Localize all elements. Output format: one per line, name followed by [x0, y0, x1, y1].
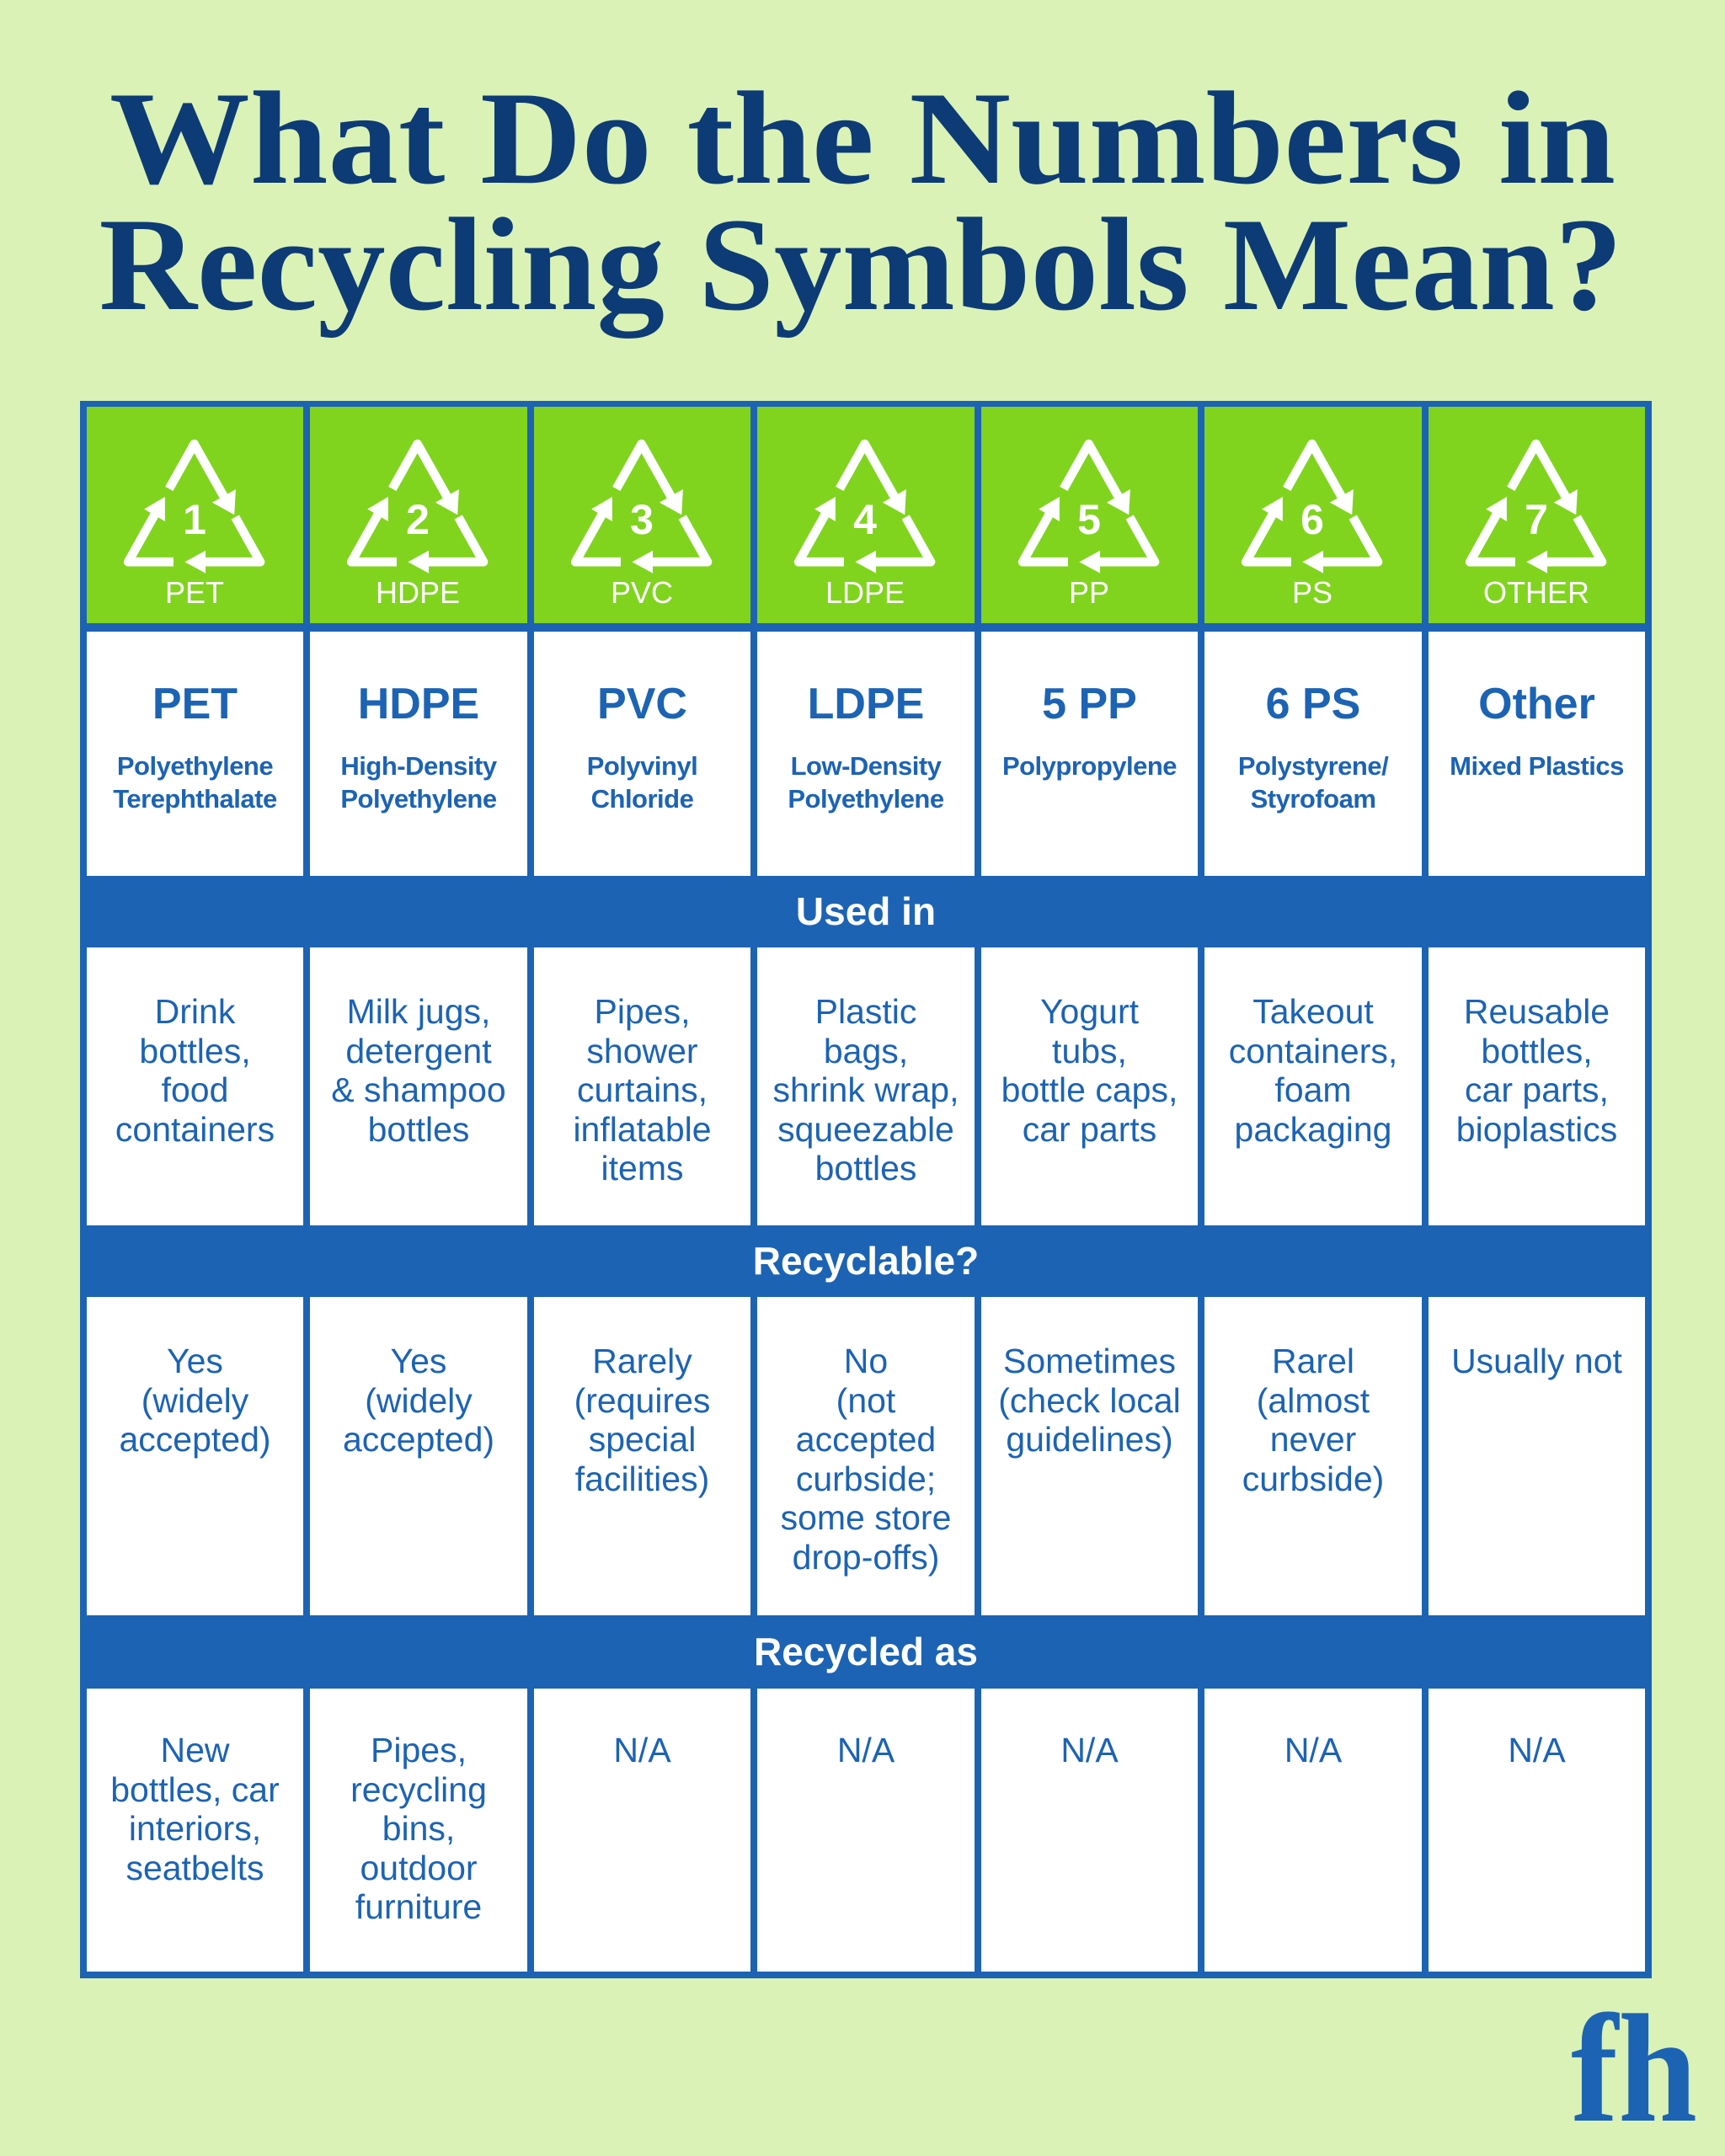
- table: [80, 401, 1652, 1978]
- recyclable cell 5: [981, 1297, 1198, 1615]
- used cell 1: food: [162, 1070, 228, 1109]
- name cell 6: Styrofoam: [1251, 784, 1375, 814]
- recycled cell 7: N/A: [1508, 1731, 1566, 1769]
- recyclable cell 1: (widely: [142, 1381, 248, 1420]
- used cell 6: packaging: [1235, 1110, 1391, 1149]
- name cell 7: Other: [1478, 680, 1595, 728]
- icon cell 6: [1204, 407, 1422, 623]
- recycled cell 5: [981, 1689, 1198, 1972]
- name cell 1: PET: [152, 680, 238, 728]
- used cell 7: bottles,: [1481, 1031, 1593, 1070]
- recycled cell 1: bottles, car: [110, 1770, 280, 1809]
- used cell 6: containers,: [1229, 1031, 1397, 1070]
- recycled cell 2: recycling: [350, 1770, 487, 1809]
- recycled cell 2: Pipes,: [371, 1731, 467, 1769]
- band: Recycled as: Recycled as: [754, 1630, 978, 1673]
- recycled cell 1: New: [160, 1731, 230, 1769]
- used cell 1: [87, 947, 303, 1225]
- icon cell 3: 3: [630, 496, 654, 543]
- used cell 4: squeezable: [777, 1110, 954, 1149]
- recyclable cell 1: Yes: [167, 1342, 223, 1380]
- recyclable cell 6: curbside): [1242, 1459, 1384, 1497]
- name cell 1: Polyethylene: [117, 751, 273, 781]
- recycled cell 2: outdoor: [360, 1848, 478, 1886]
- name cell 6: Polystyrene/: [1238, 751, 1388, 781]
- band: Used in: Used in: [796, 889, 936, 933]
- name cell 2: [310, 632, 527, 876]
- recyclable cell 3: Rarely: [592, 1342, 692, 1380]
- recyclable cell 3: facilities): [575, 1459, 709, 1497]
- icon cell 1: [87, 407, 303, 623]
- band: Recyclable?: Recyclable?: [753, 1239, 979, 1283]
- recyclable cell 3: special: [589, 1420, 696, 1459]
- recyclable cell 6: Rarel: [1272, 1342, 1354, 1380]
- name cell 7: Mixed Plastics: [1450, 751, 1624, 781]
- used cell 1: Drink: [155, 992, 235, 1031]
- used cell 4: shrink wrap,: [772, 1070, 959, 1109]
- used cell 4: bags,: [824, 1031, 908, 1070]
- icon cell 2: [310, 407, 527, 623]
- title: Recycling Symbols Mean?: [99, 191, 1622, 339]
- recyclable cell 4: accepted: [796, 1420, 936, 1459]
- name cell 3: Polyvinyl: [587, 751, 697, 781]
- used cell 6: Takeout: [1252, 992, 1374, 1031]
- used cell 2: Milk jugs,: [347, 992, 490, 1031]
- recyclable cell 4: curbside;: [796, 1459, 936, 1497]
- name cell 1: [87, 632, 303, 876]
- used cell 7: car parts,: [1465, 1070, 1609, 1109]
- recyclable cell 4: [757, 1297, 975, 1615]
- recycled cell 6: N/A: [1284, 1731, 1342, 1769]
- icon cell 5: 5: [1077, 496, 1101, 543]
- icon cell 5: [981, 407, 1198, 623]
- icon cell 1: 1: [183, 496, 206, 543]
- used cell 2: [310, 947, 527, 1225]
- used cell 3: [534, 947, 750, 1225]
- name cell 3: Chloride: [591, 784, 693, 814]
- icon cell 1: PET: [165, 575, 224, 610]
- name cell 3: [534, 632, 750, 876]
- icon cell 4: [757, 407, 975, 623]
- used cell 7: Reusable: [1464, 992, 1610, 1031]
- icon cell 7: 7: [1525, 496, 1548, 543]
- used cell 5: bottle caps,: [1001, 1070, 1178, 1109]
- recycled cell 5: N/A: [1060, 1731, 1119, 1769]
- recyclable cell 2: (widely: [365, 1381, 473, 1420]
- recyclable cell 4: drop-offs): [793, 1538, 939, 1577]
- recyclable cell 3: (requires: [574, 1381, 710, 1420]
- used cell 4: bottles: [815, 1149, 916, 1187]
- name cell 7: [1429, 632, 1645, 876]
- recyclable cell 1: accepted): [119, 1420, 271, 1459]
- title: [99, 65, 1622, 339]
- used cell 3: shower: [586, 1031, 698, 1070]
- recycled cell 2: furniture: [355, 1887, 482, 1926]
- icon cell 3: PVC: [611, 575, 673, 610]
- icon cell 5: PP: [1069, 575, 1109, 610]
- used cell 4: [757, 947, 975, 1225]
- recycled cell 1: interiors,: [129, 1809, 261, 1848]
- name cell 4: Low-Density: [791, 751, 941, 781]
- recyclable cell 3: [534, 1297, 750, 1615]
- name cell 2: Polyethylene: [340, 784, 497, 814]
- recyclable cell 6: [1204, 1297, 1422, 1615]
- icon cell 6: PS: [1292, 575, 1332, 610]
- recyclable cell 5: (check local: [998, 1381, 1181, 1420]
- used cell 7: [1429, 947, 1645, 1225]
- used cell 1: bottles,: [139, 1031, 251, 1070]
- used cell 3: items: [601, 1149, 683, 1187]
- icon cell 7: OTHER: [1483, 575, 1589, 610]
- recyclable cell 5: Sometimes: [1003, 1342, 1176, 1380]
- used cell 3: inflatable: [573, 1110, 712, 1149]
- name cell 6: [1204, 632, 1422, 876]
- icon cell 7: [1429, 407, 1645, 623]
- used cell 4: Plastic: [815, 992, 916, 1031]
- recyclable cell 2: Yes: [391, 1342, 446, 1380]
- title: What Do the Numbers in: [109, 65, 1616, 212]
- icon cell 3: [534, 407, 750, 623]
- icon cell 2: 2: [406, 496, 430, 543]
- recyclable cell 7: Usually not: [1451, 1342, 1622, 1380]
- recycled cell 7: [1429, 1689, 1645, 1972]
- recyclable cell 1: [87, 1297, 303, 1615]
- name cell 5: Polypropylene: [1002, 751, 1177, 781]
- recyclable cell 4: some store: [781, 1498, 951, 1537]
- recycled cell 3: [534, 1689, 750, 1972]
- name cell 1: Terephthalate: [113, 784, 277, 814]
- name cell 4: [757, 632, 975, 876]
- recycled cell 4: N/A: [837, 1731, 895, 1769]
- used cell 5: [981, 947, 1198, 1225]
- recyclable cell 6: never: [1270, 1420, 1356, 1459]
- used cell 2: & shampoo: [331, 1070, 506, 1109]
- recyclable cell 5: guidelines): [1006, 1420, 1173, 1459]
- icon cell 2: HDPE: [376, 575, 460, 610]
- used cell 6: foam: [1274, 1070, 1352, 1109]
- recycled cell 2: [310, 1689, 527, 1972]
- used cell 2: bottles: [368, 1110, 469, 1149]
- recycled cell 1: seatbelts: [126, 1848, 264, 1886]
- name cell 2: High-Density: [340, 751, 497, 781]
- name cell 6: 6 PS: [1266, 680, 1360, 728]
- icon cell 4: LDPE: [825, 575, 905, 610]
- icon cell 4: 4: [853, 496, 877, 543]
- name cell 5: 5 PP: [1042, 680, 1137, 728]
- used cell 5: car parts: [1023, 1110, 1156, 1149]
- recycled cell 4: [757, 1689, 975, 1972]
- used cell 3: Pipes,: [595, 992, 690, 1031]
- recyclable cell 4: No: [844, 1342, 888, 1380]
- name cell 4: LDPE: [808, 680, 924, 728]
- name cell 4: Polyethylene: [788, 784, 944, 814]
- used cell 5: Yogurt: [1040, 992, 1139, 1031]
- used cell 7: bioplastics: [1456, 1110, 1617, 1149]
- recycled cell 3: N/A: [613, 1731, 671, 1769]
- name cell 3: PVC: [597, 680, 687, 728]
- icon cell 6: 6: [1300, 496, 1324, 543]
- recyclable cell 2: accepted): [343, 1420, 494, 1459]
- recycled cell 6: [1204, 1689, 1422, 1972]
- recycled cell 1: [87, 1689, 303, 1972]
- name cell 2: HDPE: [358, 680, 479, 728]
- used cell 6: [1204, 947, 1422, 1225]
- recyclable cell 4: (not: [836, 1381, 895, 1420]
- recyclable cell 7: [1429, 1297, 1645, 1615]
- used cell 1: containers: [115, 1110, 275, 1149]
- recycled cell 2: bins,: [382, 1809, 455, 1848]
- recyclable cell 2: [310, 1297, 527, 1615]
- used cell 2: detergent: [345, 1031, 492, 1070]
- used cell 5: tubs,: [1052, 1031, 1127, 1070]
- name cell 5: [981, 632, 1198, 876]
- recyclable cell 6: (almost: [1257, 1381, 1370, 1420]
- used cell 3: curtains,: [577, 1070, 708, 1109]
